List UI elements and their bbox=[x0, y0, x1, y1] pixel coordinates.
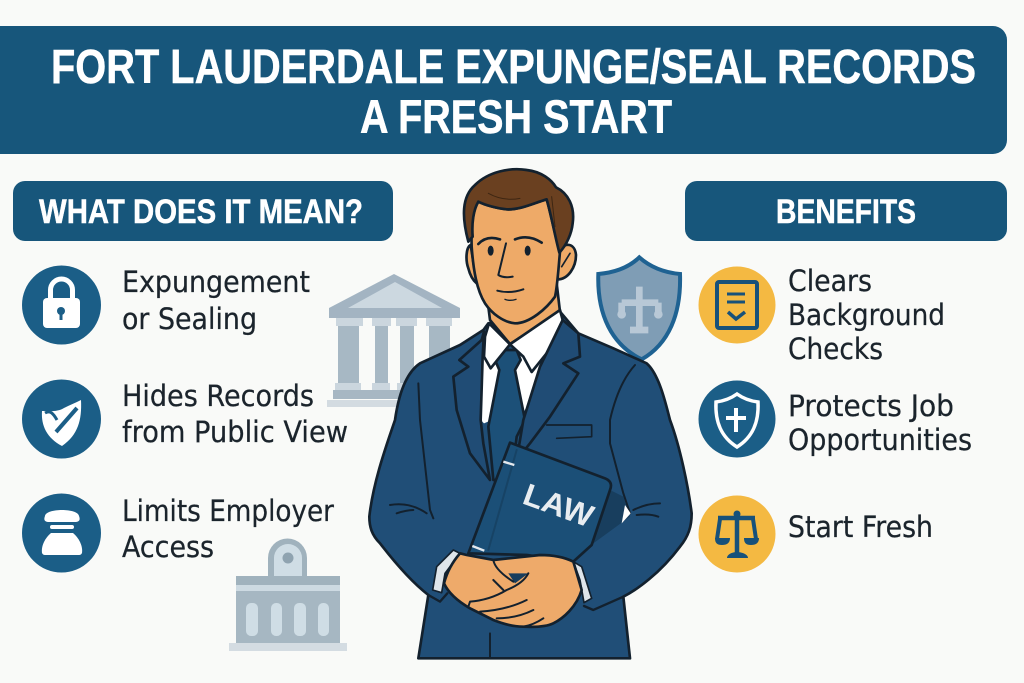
heading: what does it mean: WHAT DOES IT MEAN? bbox=[39, 193, 363, 231]
jacket seams bbox=[390, 365, 660, 658]
title banner: A FRESH START bbox=[360, 90, 672, 143]
icon: employer access bbox=[22, 494, 101, 572]
icon: shield cross bbox=[698, 380, 776, 458]
facial features bbox=[478, 193, 570, 300]
neck bbox=[488, 283, 560, 344]
text: protects job bbox=[788, 389, 972, 457]
text: expungement: or Sealing bbox=[122, 302, 257, 336]
text: clears checks: Background bbox=[788, 298, 945, 332]
fingers bbox=[468, 560, 543, 627]
suit jacket bbox=[369, 312, 692, 658]
icon: padlock bbox=[22, 266, 101, 344]
text: start fresh: Start Fresh bbox=[788, 510, 933, 544]
icon: courthouse bbox=[327, 274, 460, 407]
sleeve opening bbox=[593, 490, 630, 543]
book spine bbox=[488, 450, 517, 550]
text: clears checks: Checks bbox=[788, 332, 883, 366]
text: hides records: Hides Records bbox=[122, 379, 314, 413]
text: limits access: Limits Employer bbox=[122, 494, 334, 528]
text: hides records bbox=[122, 379, 348, 449]
text: protects job: Protects Job bbox=[788, 389, 954, 423]
book marks bbox=[472, 462, 514, 551]
heading: what does it mean bbox=[13, 181, 393, 241]
right lapel bbox=[517, 320, 580, 460]
icon: shield check bbox=[22, 380, 101, 458]
collar bbox=[484, 310, 563, 372]
text: hides records: from Public View bbox=[122, 415, 348, 449]
text: clears checks: Clears bbox=[788, 264, 872, 298]
sleeve ends bbox=[428, 593, 623, 610]
pocket bbox=[547, 425, 592, 438]
hair bbox=[464, 169, 573, 253]
illustration: lawyer bbox=[369, 169, 692, 658]
text: limits access: Access bbox=[122, 530, 214, 564]
tie bbox=[488, 350, 525, 480]
heading: benefits: BENEFITS bbox=[776, 193, 916, 231]
face bbox=[472, 199, 560, 323]
text: clears checks bbox=[788, 264, 945, 366]
icon: justice shield bbox=[598, 257, 680, 359]
icon: checklist bbox=[698, 266, 776, 344]
gap between hands bbox=[508, 573, 528, 583]
text: expungement bbox=[122, 265, 310, 336]
law book bbox=[468, 443, 611, 562]
heading: benefits bbox=[685, 181, 1007, 241]
text: protects job: Opportunities bbox=[788, 423, 972, 457]
book label: LAW bbox=[519, 477, 599, 534]
text: expungement: Expungement bbox=[122, 265, 310, 299]
text: limits access bbox=[122, 494, 334, 564]
icon: bank building bbox=[229, 538, 347, 651]
icon: scales bbox=[698, 496, 776, 572]
hands bbox=[444, 553, 582, 627]
ears bbox=[467, 245, 576, 283]
cuffs bbox=[433, 550, 592, 603]
left lapel bbox=[453, 332, 490, 480]
shirt peek bbox=[622, 505, 631, 523]
shirt bbox=[481, 347, 547, 423]
title banner bbox=[0, 26, 1007, 154]
